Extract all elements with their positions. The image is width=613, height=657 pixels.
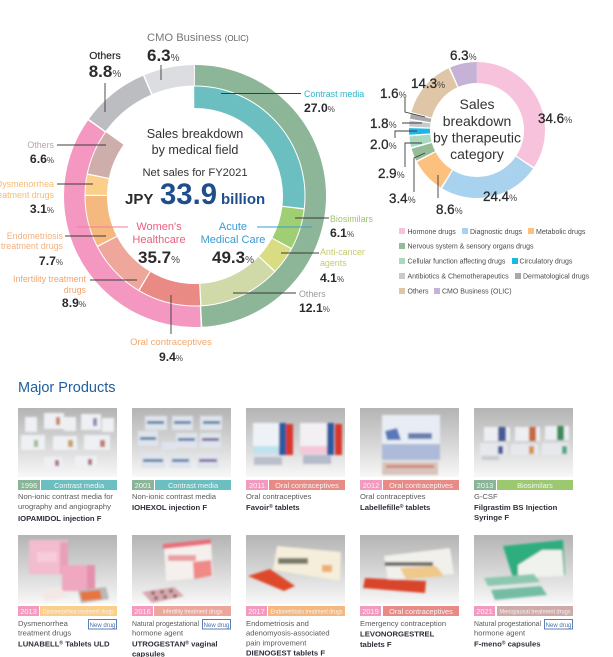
values: 2.0%: [370, 137, 397, 152]
label: Others 12.1: Others: [299, 289, 326, 299]
tag: Oral contraceptives: [275, 481, 339, 490]
legend: Circulatory drugs: [520, 258, 573, 266]
acute medical care: 49.3%: [212, 248, 254, 267]
description: [18, 492, 113, 523]
legend: Nervous system & sensory organs drugs: [408, 244, 534, 250]
label: Others 6.6: [27, 140, 55, 166]
legend: Others: [408, 288, 429, 296]
photo: [360, 535, 459, 604]
center title: Sales breakdown: [147, 127, 243, 141]
label: Oral contraceptives: Oral contraceptives: [130, 337, 212, 348]
values: [370, 48, 572, 217]
label: Others 12.1: 12.1%: [299, 301, 330, 315]
legend: Cellular function affecting drugs: [408, 258, 506, 266]
tag: Menopausal treatment drugs: [500, 610, 570, 616]
photo: [474, 408, 573, 477]
label: Anti-cancer agents: [320, 247, 365, 285]
description: hormone agent: [474, 628, 526, 638]
net sales: billion: [221, 191, 265, 208]
label: Others 12.1: [299, 289, 330, 315]
tag: Oral contraceptives: [389, 481, 453, 490]
outer ring: [74, 75, 316, 317]
description: [18, 619, 110, 648]
label: Anti-cancer agents: Anti-cancer: [320, 247, 365, 257]
tag: 2021: [476, 607, 493, 616]
net sales: [125, 167, 265, 211]
label: Endometriosis: Endometriosis: [7, 231, 63, 241]
photo: [18, 408, 117, 477]
product: Labellefille: [360, 408, 459, 512]
legend: CMO Business (OLIC): [442, 288, 512, 296]
tag: 2001: [135, 481, 151, 490]
tag: 2016: [134, 607, 151, 616]
description: Oral contraceptives: [246, 492, 312, 501]
description: Non-ionic contrast media for: [18, 492, 113, 501]
description: Favoir: [246, 503, 269, 512]
description: ®: [59, 640, 63, 646]
legend: Diagnostic drugs: [470, 229, 523, 236]
label: Endometriosis: [1, 231, 64, 268]
acute medical care: Medical Care: [201, 234, 265, 246]
tag: Endometriosis treatment drugs: [270, 610, 342, 616]
center title: category: [450, 146, 504, 162]
description: ®: [269, 503, 273, 510]
label: Others 6.6: 6.6%: [30, 152, 54, 166]
product: Favoir: [246, 408, 345, 512]
leader lines: [395, 98, 438, 198]
description: Syringe F: [474, 513, 509, 522]
product: F-meno: [474, 535, 573, 648]
values: 6.3%: [450, 48, 477, 63]
product: Iopamidol: [18, 408, 117, 523]
description: vaginal: [189, 640, 218, 648]
legend: Hormone drugs: [408, 229, 456, 236]
label: Contrast media: Contrast media: [304, 89, 364, 99]
description: Tablets ULD: [63, 640, 110, 648]
values: 3.4%: [389, 191, 416, 206]
description: pain improvement: [246, 638, 307, 648]
description: Dysmenorrhea: [18, 619, 68, 628]
description: Natural progestational: [132, 619, 199, 628]
net sales: JPY: [125, 191, 153, 208]
description: IOHEXOL injection F: [132, 503, 207, 512]
tag: Biosimilars: [517, 481, 553, 490]
tag: [360, 606, 459, 616]
tag: Oral contraceptives: [389, 607, 453, 616]
tag: [18, 606, 117, 616]
legend: Antibiotics & Chemotherapeutics: [408, 274, 509, 280]
product: Iohexol: [132, 408, 231, 512]
center title: Sales: [459, 96, 495, 112]
description: [360, 619, 446, 649]
product: Dienogest: [246, 535, 345, 657]
tag: [474, 480, 573, 490]
description: tablets F: [360, 640, 392, 649]
label: Contrast media: [304, 89, 364, 115]
description: Endometriosis and: [246, 619, 309, 628]
product: Filgrastim: [474, 408, 573, 522]
label: Biosimilars: Biosimilars: [330, 214, 373, 224]
label: Others 8.8: Others: [89, 50, 121, 62]
tag: [360, 480, 459, 490]
description: ®: [502, 640, 506, 646]
net sales: Net sales for FY2021: [142, 167, 248, 179]
tag: 2013: [477, 481, 493, 490]
center title: by therapeutic: [433, 130, 521, 146]
label: Dysmenorrhea: [0, 179, 55, 216]
label: Infertility: [13, 274, 87, 310]
tag: Contrast media: [168, 481, 219, 490]
description: F-meno: [474, 640, 502, 648]
acute medical care: Acute: [219, 221, 247, 233]
values: 34.6%: [538, 111, 572, 126]
women's healthcare: [77, 221, 186, 267]
description: LEVONORGESTREL: [360, 630, 434, 638]
description: tablets: [273, 503, 300, 512]
description: Oral contraceptives: [360, 492, 426, 501]
description: Filgrastim BS Injection: [474, 503, 557, 512]
label: Anti-cancer agents: agents: [320, 258, 347, 268]
description: IOPAMIDOL injection F: [18, 514, 102, 523]
label: Others 8.8: 8.8%: [89, 62, 121, 81]
description: tablets: [403, 503, 430, 512]
label: Biosimilars: 6.1%: [330, 226, 354, 240]
inner ring: [96, 97, 294, 295]
label: Anti-cancer agents: 4.1%: [320, 271, 344, 285]
tag: [246, 606, 345, 616]
tag: 2012: [363, 481, 379, 490]
label: Infertility: Infertility treatment: [13, 274, 86, 284]
label: CMO Business: [147, 32, 249, 65]
description: UTROGESTAN: [132, 640, 185, 648]
photo: [246, 535, 345, 604]
tag: Dysmenorrhea treatment drugs: [43, 610, 114, 616]
photo: [132, 535, 231, 604]
values: 8.6%: [436, 202, 463, 217]
badge: new drug: New drug: [90, 623, 115, 629]
tag: [18, 480, 117, 490]
tag: Contrast media: [54, 481, 105, 490]
product: Utrogestan: [132, 535, 231, 657]
description: adenomyosis-associated: [246, 628, 330, 638]
center title: by medical field: [152, 143, 238, 157]
photo: [246, 408, 345, 477]
description: treatment drugs: [18, 628, 71, 638]
photo: [132, 408, 231, 477]
label: Oral contraceptives: [130, 337, 212, 364]
values: 2.9%: [378, 166, 405, 181]
description: ®: [185, 640, 189, 646]
tag: [132, 480, 231, 490]
label: Dysmenorrhea: 3.1%: [30, 202, 54, 216]
description: [474, 492, 558, 522]
label: Biosimilars: [330, 214, 373, 240]
photo: [474, 535, 573, 604]
women's healthcare: Women's: [136, 221, 182, 233]
description: [246, 619, 330, 657]
label: CMO Business: CMO Business (OLIC): [147, 32, 249, 44]
tag: 2019: [362, 607, 379, 616]
badge: new drug: New drug: [204, 623, 229, 629]
description: [246, 492, 312, 512]
leader lines: [57, 65, 329, 334]
heading: Major Products: Major Products: [18, 380, 116, 396]
product: Lunabell: [18, 535, 117, 648]
ring: [420, 72, 534, 188]
description: Natural progestational: [474, 619, 541, 628]
description: hormone agent: [132, 628, 184, 638]
values: 1.6%: [380, 86, 407, 101]
description: Non-ionic contrast media: [132, 492, 217, 501]
description: [132, 619, 218, 657]
tag: [474, 606, 573, 616]
photo: [18, 535, 117, 604]
tag: 2017: [248, 607, 265, 616]
tag: 2013: [20, 607, 37, 616]
acute medical care: [201, 221, 312, 267]
description: G-CSF: [474, 492, 498, 501]
label: Others 6.6: Others: [27, 140, 55, 150]
values: 24.4%: [483, 189, 517, 204]
description: urography and angiography: [18, 502, 111, 511]
label: Infertility: drugs: [64, 285, 87, 295]
description: [132, 492, 217, 512]
values: 14.3%: [411, 76, 445, 91]
product: Levonorgestrel: [360, 535, 459, 649]
description: [474, 619, 541, 648]
badge: new drug: New drug: [546, 623, 571, 629]
label: Endometriosis: 7.7%: [39, 254, 63, 268]
chart: sales breakdown by medical field: [0, 32, 373, 364]
women's healthcare: Healthcare: [132, 234, 186, 246]
photo: [360, 408, 459, 477]
description: Labellefille: [360, 503, 400, 512]
tag: 1996: [21, 481, 37, 490]
chart: sales breakdown by therapeutic category: [370, 48, 590, 296]
legend: Metabolic drugs: [536, 229, 586, 236]
tag: [246, 480, 345, 490]
legend: [399, 228, 590, 296]
description: ®: [400, 503, 404, 510]
label: Others 8.8: [89, 50, 121, 81]
tag: Infertility treatment drugs: [162, 610, 222, 616]
tag: [132, 606, 231, 616]
women's healthcare: 35.7%: [138, 248, 180, 267]
values: 1.8%: [370, 116, 397, 131]
label: CMO Business: 6.3%: [147, 46, 180, 65]
description: [360, 492, 430, 512]
label: Contrast media: 27.0%: [304, 101, 335, 115]
label: Oral contraceptives: 9.4%: [159, 350, 183, 364]
description: Emergency contraception: [360, 619, 446, 628]
legend: Dermatological drugs: [523, 274, 590, 280]
label: Infertility: 8.9%: [62, 296, 86, 310]
tag: 2011: [249, 481, 265, 490]
net sales: 33.9: [160, 178, 217, 211]
center title: breakdown: [443, 113, 511, 129]
description: LUNABELL: [18, 640, 59, 648]
description: capsules: [505, 640, 540, 648]
label: Endometriosis: treatment drugs: [1, 241, 64, 251]
